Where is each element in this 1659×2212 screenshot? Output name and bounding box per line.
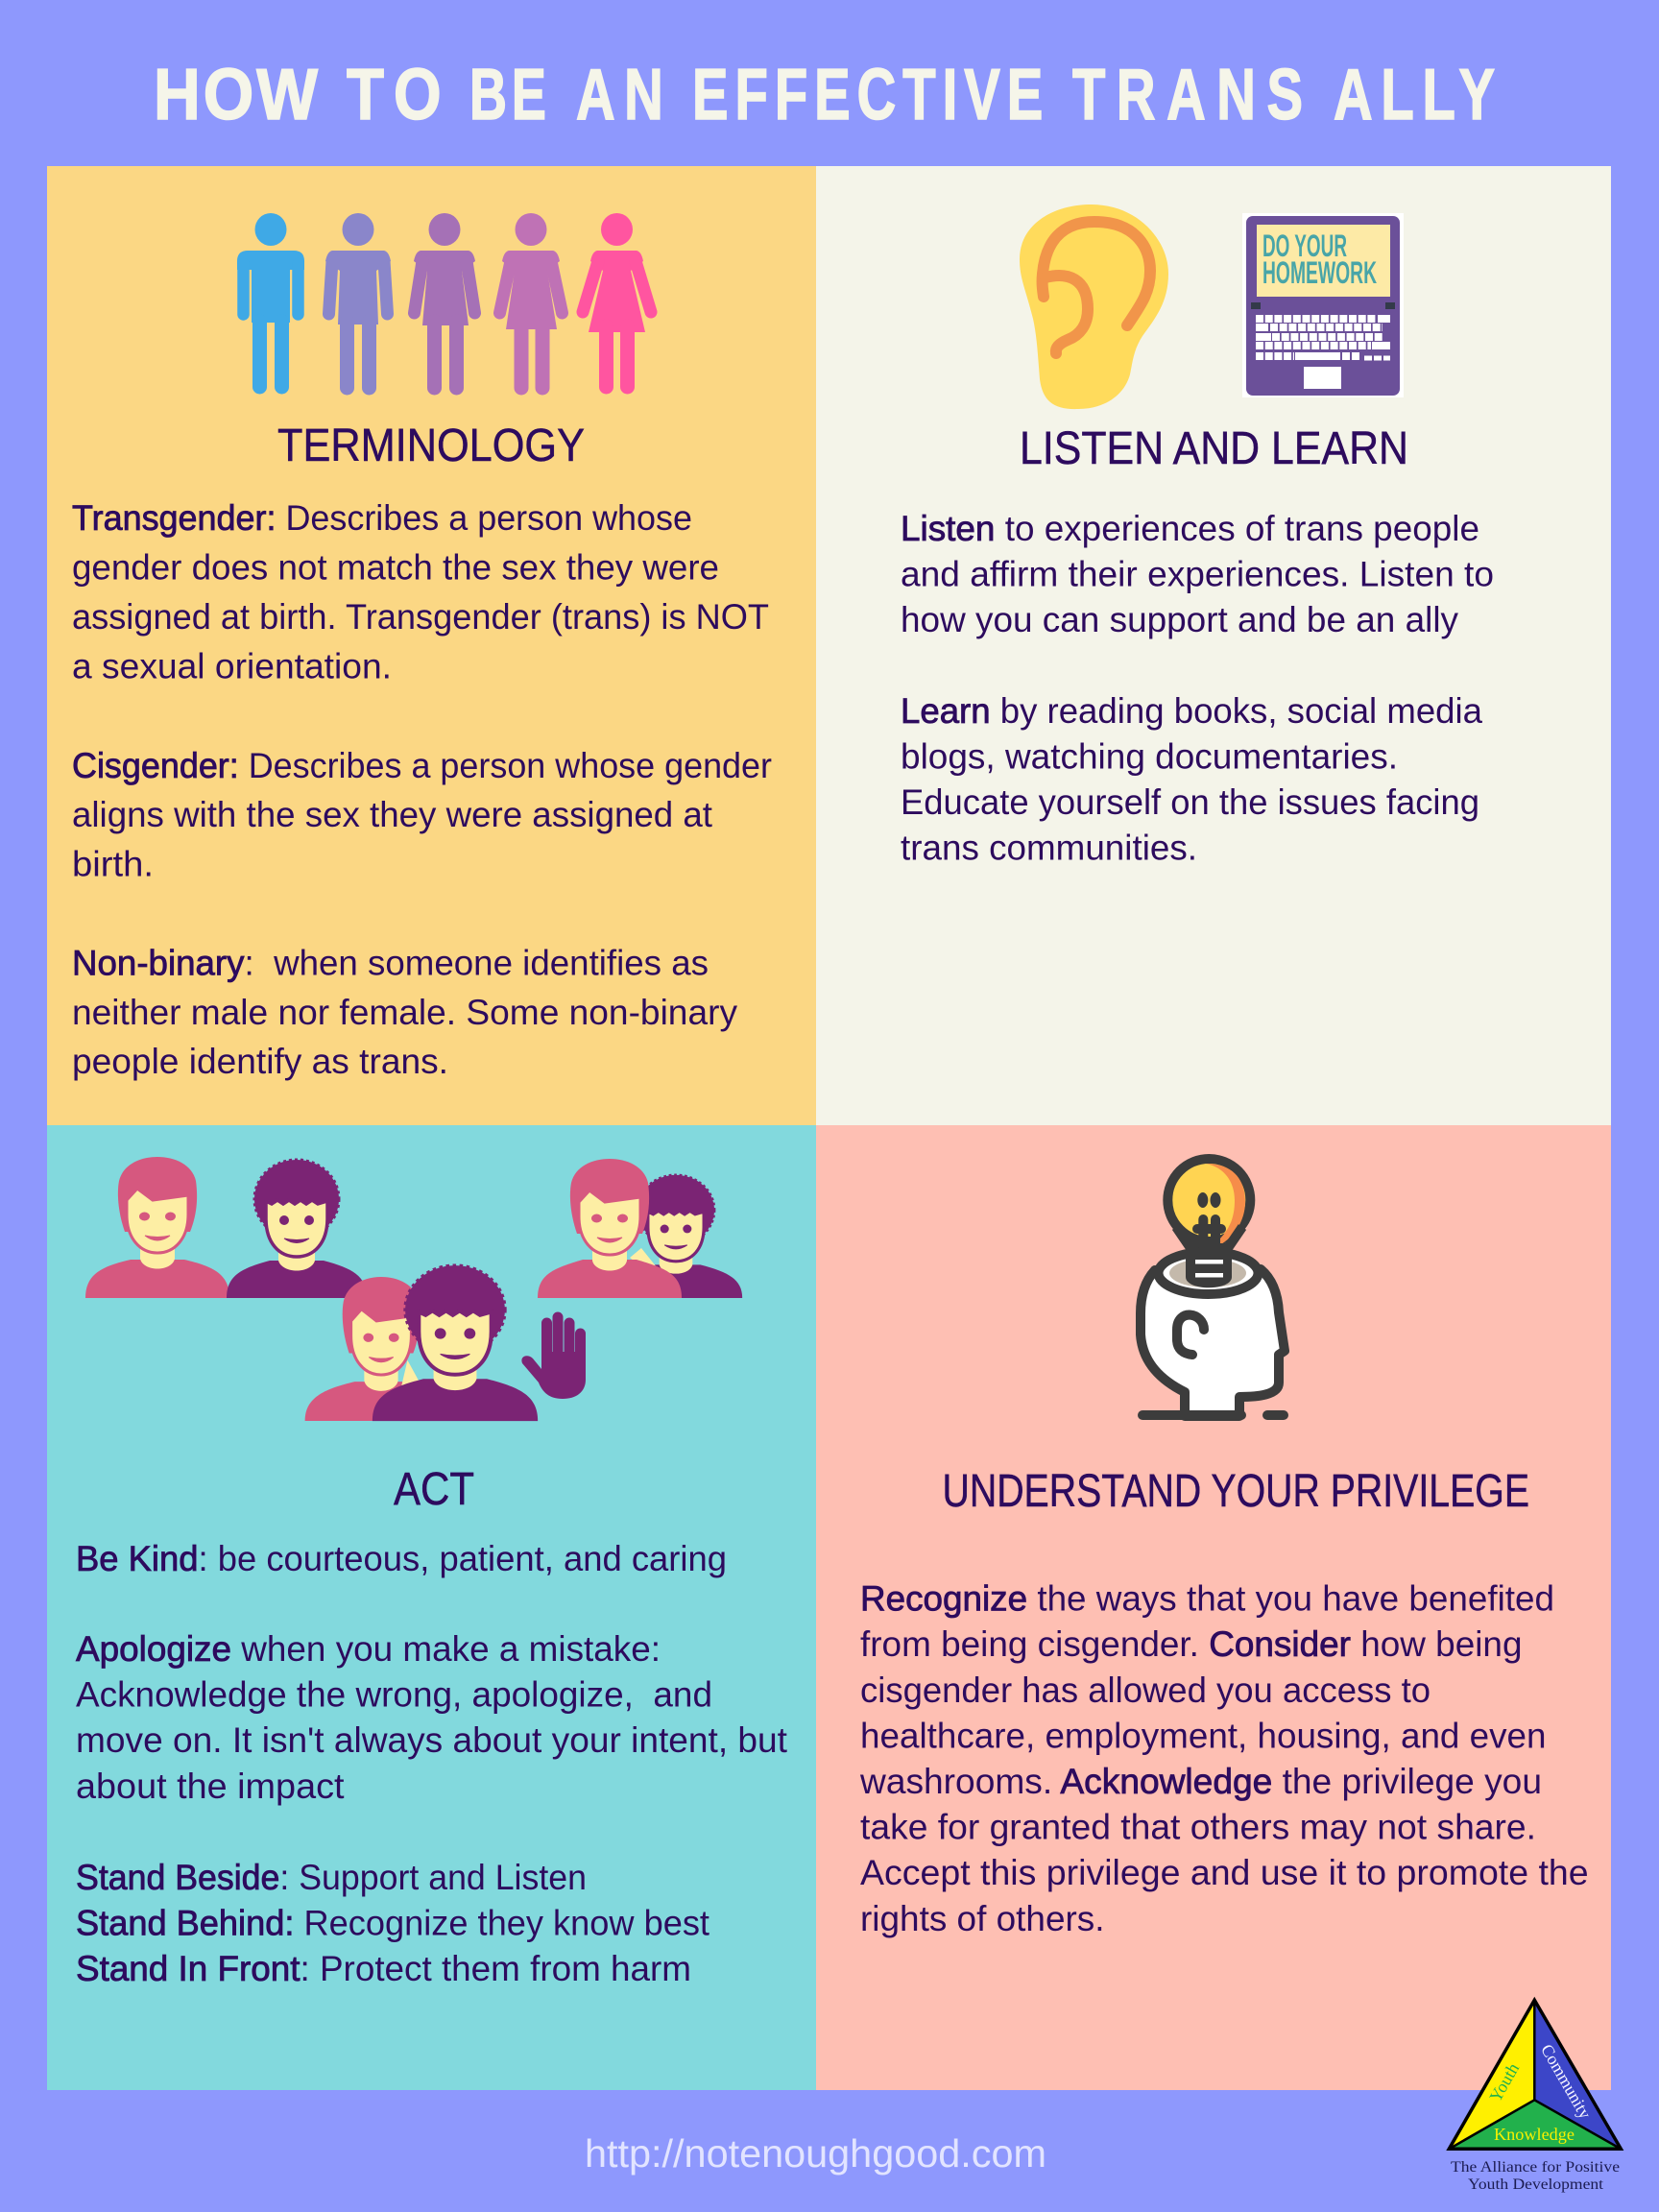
title — [154, 54, 1495, 135]
text: listen and learn body — [901, 509, 1494, 868]
text: privilege body: cisgender has allowed you access to — [860, 1671, 1431, 1710]
text: act body: Stand In Front: Protect them from harm — [76, 1949, 691, 1988]
text: listen and learn body: trans communities. — [901, 828, 1197, 868]
pink person — [85, 1157, 229, 1298]
text: privilege body: take for granted that others may not share. — [860, 1807, 1536, 1847]
logo: alliance for positive youth development: Youth — [1485, 2059, 1523, 2105]
icon: laptop do your homework — [1242, 213, 1404, 397]
text: act body: Stand Behind: Recognize they know best — [76, 1904, 710, 1943]
heading: listen and learn: LISTEN AND LEARN — [1020, 423, 1408, 474]
icon: five gender figures — [237, 213, 651, 388]
icon: ear — [1020, 204, 1168, 409]
purple person in front — [373, 1265, 538, 1421]
pink person behind — [305, 1277, 451, 1421]
logo: alliance for positive youth development: The Alliance for Positive — [1451, 2159, 1620, 2176]
footer url: http://notenoughgood.com — [585, 2131, 1046, 2176]
heading: understand your privilege: UNDERSTAND YOUR PRIVILEGE — [943, 1466, 1529, 1517]
logo: alliance for positive youth development — [1449, 2000, 1621, 2193]
title: ALLY — [1334, 55, 1495, 135]
logo: alliance for positive youth development: Community — [1537, 2041, 1595, 2122]
text: listen and learn body: and affirm their experiences. Listen to — [901, 555, 1494, 593]
text: privilege body: Accept this privilege and use it to promote the — [860, 1853, 1589, 1892]
title: EFFECTIVE — [692, 55, 1043, 135]
icon: pair with stop hand — [305, 1265, 586, 1421]
text: listen and learn body: how you can support and be an ally — [901, 600, 1458, 639]
text: privilege body: rights of others. — [860, 1899, 1104, 1938]
text: definitions: people identify as trans. — [72, 1042, 448, 1081]
panel: understand your privilege — [816, 1125, 1611, 2090]
icon: laptop do your homework: HOMEWORK — [1262, 255, 1377, 290]
text: definitions: birth. — [72, 845, 154, 883]
figure 4 — [499, 213, 563, 388]
text: privilege body: from being cisgender. Consider how being — [860, 1624, 1523, 1664]
panel: act — [47, 1125, 816, 2090]
text: act body — [76, 1539, 788, 1988]
ground lines — [1142, 1410, 1284, 1420]
text: listen and learn body: blogs, watching documentaries. — [901, 737, 1398, 776]
title: BE — [469, 54, 546, 134]
text: definitions: aligns with the sex they were assigned at — [72, 795, 713, 834]
icon: pair side by side — [85, 1157, 367, 1298]
heading: act: ACT — [394, 1464, 474, 1515]
text: act body: Acknowledge the wrong, apologize, and — [76, 1674, 712, 1715]
text: definitions — [72, 498, 772, 1081]
title: TRANS — [1072, 55, 1303, 135]
ear mark — [1177, 1315, 1204, 1355]
figure 5 — [583, 213, 651, 387]
icon: laptop do your homework: DO YOUR — [1262, 228, 1347, 263]
title: AN — [576, 55, 663, 135]
title: TO — [347, 54, 442, 134]
text: privilege body: healthcare, employment, housing, and even — [860, 1717, 1546, 1755]
text: privilege body: Recognize the ways that you have benefited — [860, 1578, 1554, 1619]
text: definitions: a sexual orientation. — [72, 646, 392, 685]
text: privilege body — [859, 1578, 1589, 1938]
skin shoulder patch — [630, 1248, 657, 1269]
light bulb — [1167, 1159, 1250, 1250]
text: definitions: gender does not match the sex they were — [72, 547, 719, 587]
purple person — [227, 1160, 367, 1298]
text: definitions: Non-binary: when someone identifies as — [72, 943, 709, 983]
icon: pair one behind the other — [538, 1159, 742, 1298]
head outline — [1141, 1269, 1285, 1416]
head rim — [1158, 1252, 1258, 1294]
panel: terminology — [47, 166, 816, 1125]
purple person behind — [613, 1175, 742, 1298]
text: act body: Apologize when you make a mistake: — [76, 1629, 661, 1669]
heading: terminology: TERMINOLOGY — [277, 421, 585, 471]
pink person in front — [538, 1159, 682, 1298]
text: listen and learn body: Listen to experiences of trans people — [901, 509, 1479, 548]
text: definitions: assigned at birth. Transgender (trans) is NOT — [72, 597, 769, 637]
figure 1 — [237, 213, 304, 387]
text: listen and learn body: Learn by reading books, social media — [901, 691, 1482, 731]
logo: alliance for positive youth development: Youth Development — [1468, 2176, 1604, 2193]
text: listen and learn body: Educate yourself on the issues facing — [901, 782, 1479, 822]
text: privilege body: washrooms. Acknowledge the privilege you — [859, 1762, 1542, 1801]
figure 3 — [414, 213, 475, 388]
text: definitions: Transgender: Describes a person whose — [72, 498, 692, 538]
logo: alliance for positive youth development: Knowledge — [1494, 2125, 1575, 2144]
panel: listen and learn — [816, 166, 1611, 1125]
title: HOW — [154, 55, 319, 135]
text: definitions: Cisgender: Describes a person whose gender — [72, 746, 772, 785]
text: definitions: neither male nor female. Some non-binary — [72, 993, 737, 1032]
text: act body: Be Kind: be courteous, patient, and caring — [76, 1539, 727, 1578]
text: act body: about the impact — [76, 1767, 345, 1806]
text: act body: move on. It isn't always about your intent, but — [76, 1720, 788, 1760]
figure 2 — [325, 213, 391, 388]
icon: head with light bulb — [1141, 1159, 1285, 1416]
text: act body: Stand Beside: Support and Listen — [76, 1858, 587, 1897]
stop hand — [521, 1317, 586, 1399]
